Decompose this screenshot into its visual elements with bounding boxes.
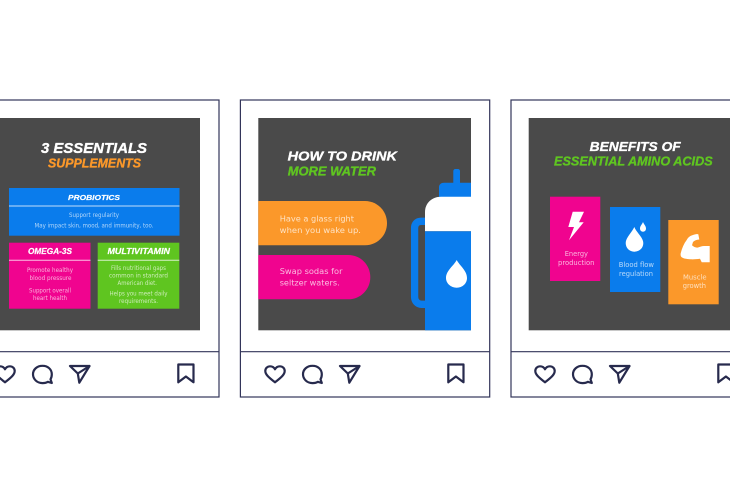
icon: flexed arm bbox=[681, 234, 710, 262]
box: multivitamin bbox=[98, 243, 179, 309]
card: energy production bbox=[550, 197, 600, 281]
pill: have a glass: Have a glass right bbox=[280, 213, 355, 223]
box: multivitamin: Helps you meet daily bbox=[110, 290, 168, 297]
pill: swap sodas bbox=[258, 255, 370, 299]
card 1: 3 essentials supplements bbox=[0, 100, 219, 397]
action icons 3 bbox=[535, 364, 730, 383]
pill: have a glass bbox=[258, 201, 387, 245]
post frame 1 bbox=[0, 100, 219, 397]
box: multivitamin: Fills nutritional gaps bbox=[111, 265, 166, 272]
box: probiotics: Support regularity bbox=[69, 212, 119, 219]
action icons 2 bbox=[265, 364, 464, 383]
card: muscle growth bbox=[668, 220, 719, 304]
title: how to drink: HOW TO DRINK bbox=[288, 149, 399, 164]
subtitle: supplements: SUPPLEMENTS bbox=[48, 156, 141, 171]
pill: swap sodas: seltzer waters. bbox=[280, 278, 340, 288]
subtitle: essential amino acids: ESSENTIAL AMINO ACIDS bbox=[554, 154, 713, 169]
box: omega-3s bbox=[9, 243, 90, 309]
box: probiotics: May impact skin, mood, and immunity, too. bbox=[34, 223, 154, 230]
box: multivitamin: American diet. bbox=[118, 280, 157, 287]
panel: amino acids bbox=[529, 118, 730, 330]
box: probiotics bbox=[9, 188, 180, 236]
card: blood flow regulation: regulation bbox=[619, 269, 653, 278]
post frame 2 bbox=[240, 100, 490, 397]
box: multivitamin: requirements. bbox=[119, 298, 158, 305]
card 2: how to drink more water bbox=[240, 100, 490, 397]
box: multivitamin: common in standard bbox=[109, 272, 168, 279]
box: omega-3s: Support overall bbox=[29, 287, 71, 294]
icon: water bottle bbox=[415, 169, 472, 330]
action icons 1 bbox=[0, 364, 194, 383]
post frame 3 bbox=[511, 100, 730, 397]
card: muscle growth: growth bbox=[683, 281, 706, 290]
box: omega-3s: heart health bbox=[33, 295, 67, 302]
card 3: benefits of essential amino acids bbox=[511, 100, 730, 397]
card: blood flow regulation bbox=[610, 207, 660, 292]
box: omega-3s: Promote healthy bbox=[27, 267, 73, 274]
pill: have a glass: when you wake up. bbox=[280, 225, 361, 235]
box: omega-3s: blood pressure bbox=[30, 275, 72, 282]
card: energy production: production bbox=[558, 258, 594, 267]
subtitle: more water: MORE WATER bbox=[288, 163, 376, 178]
title: 3 essentials: 3 ESSENTIALS bbox=[41, 141, 147, 157]
box: probiotics: PROBIOTICS bbox=[68, 193, 120, 202]
card: muscle growth: Muscle bbox=[683, 272, 707, 281]
box: multivitamin: MULTIVITAMIN bbox=[108, 247, 170, 256]
panel: water bbox=[258, 118, 471, 330]
pill: swap sodas: Swap sodas for bbox=[280, 266, 343, 276]
icon: lightning bolt bbox=[568, 212, 584, 240]
box: omega-3s: OMEGA-3S bbox=[28, 247, 73, 256]
panel: supplements bbox=[0, 118, 200, 330]
icon: water drops bbox=[626, 222, 646, 252]
title: benefits of: BENEFITS OF bbox=[590, 139, 682, 154]
card: energy production: Energy bbox=[565, 249, 589, 258]
card: blood flow regulation: Blood flow bbox=[619, 260, 654, 269]
